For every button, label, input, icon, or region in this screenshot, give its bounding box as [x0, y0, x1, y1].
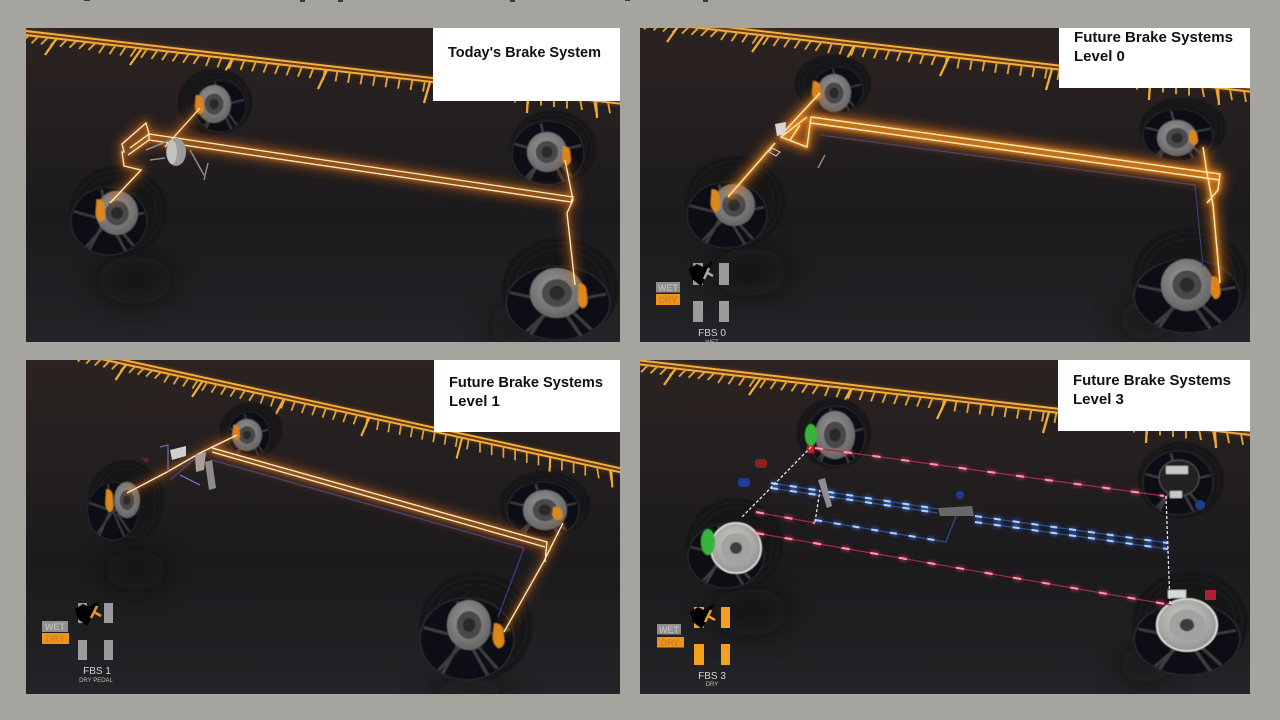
wheel: front right — [1132, 228, 1248, 333]
red circuit lines — [756, 448, 1171, 605]
hidden circuit line — [820, 135, 1203, 267]
wheel: rear left — [178, 69, 252, 135]
legend: FBS 0: FBS 0 — [698, 328, 726, 339]
wheel: rear right — [1138, 442, 1224, 518]
ruler track — [0, 28, 640, 118]
brake lines — [127, 435, 563, 632]
legend: FBS 1 — [42, 601, 114, 684]
wheel shadows — [728, 602, 1166, 684]
wheel: front left — [687, 498, 783, 590]
wheel: front right — [502, 238, 618, 340]
wheels — [687, 398, 1248, 675]
wheels — [70, 69, 618, 340]
wheel: rear right — [1140, 98, 1226, 161]
panel: Future Brake Systems Level 1 — [26, 349, 651, 702]
wheel: rear left — [795, 55, 871, 113]
brake lines — [728, 93, 1220, 283]
blue circuit lines — [771, 483, 1168, 549]
legend: FBS 3 — [657, 604, 730, 688]
title box: Level 0 — [1074, 48, 1125, 65]
legend: FBS 1: DRY — [46, 634, 65, 644]
wheel: front right — [1132, 572, 1248, 675]
hidden circuit line — [170, 450, 524, 617]
wheels — [88, 402, 590, 680]
ruler track — [619, 358, 1259, 448]
panel: Today's Brake System — [0, 28, 640, 345]
panel: Future Brake Systems Level 3 — [619, 358, 1259, 694]
title box — [1058, 360, 1250, 431]
legend: FBS 0: WET — [658, 283, 678, 293]
ruler track — [643, 28, 1250, 106]
legend: FBS 1: WET — [45, 622, 65, 632]
cut-off heading remnants — [84, 0, 708, 2]
title box — [434, 360, 620, 432]
actuator markers — [738, 459, 1216, 600]
legend: FBS 0: DRY — [659, 295, 677, 305]
wheel shadows — [440, 680, 500, 694]
wheel: front left — [685, 156, 785, 248]
connecting dashed lines — [742, 447, 1170, 605]
title box: Future Brake Systems — [1074, 29, 1233, 46]
legend: FBS 3: DRY — [661, 638, 679, 648]
wheel shadows — [712, 248, 1171, 340]
actuators and pedal — [818, 478, 974, 516]
legend: FBS 3: FBS 3 — [698, 671, 726, 682]
legend: FBS 1: FBS 1 — [83, 666, 111, 677]
title box: Level 1 — [449, 393, 500, 410]
legend: FBS 1: DRY PEDAL — [79, 678, 114, 684]
wheel: rear left — [797, 398, 871, 468]
title box: Future Brake Systems — [1073, 372, 1231, 389]
legend: FBS 3: DRY — [706, 682, 718, 688]
ruler track — [77, 360, 620, 488]
pedal unit — [769, 122, 825, 168]
title box — [433, 28, 620, 101]
wheel: rear right — [510, 110, 596, 186]
brake booster and pedal — [146, 138, 208, 180]
title box — [1059, 28, 1250, 88]
legend: FBS 0 — [656, 261, 729, 346]
brake lines — [110, 108, 575, 285]
wheel shadows — [97, 256, 541, 345]
pedal unit — [141, 445, 216, 490]
panel: Future Brake Systems Level 0 — [622, 15, 1262, 346]
wheel: front right — [420, 572, 532, 680]
legend: FBS 3: WET — [659, 625, 679, 635]
wheel: rear right — [500, 472, 590, 538]
title box: Future Brake Systems — [449, 374, 603, 391]
title box: Level 3 — [1073, 391, 1124, 408]
title box: Today's Brake System — [448, 44, 601, 61]
wheel: rear left — [220, 402, 282, 458]
wheel: front left — [70, 166, 166, 256]
wheels — [685, 55, 1248, 333]
wheel: front left — [88, 460, 164, 542]
legend: FBS 0: WET — [705, 340, 719, 346]
